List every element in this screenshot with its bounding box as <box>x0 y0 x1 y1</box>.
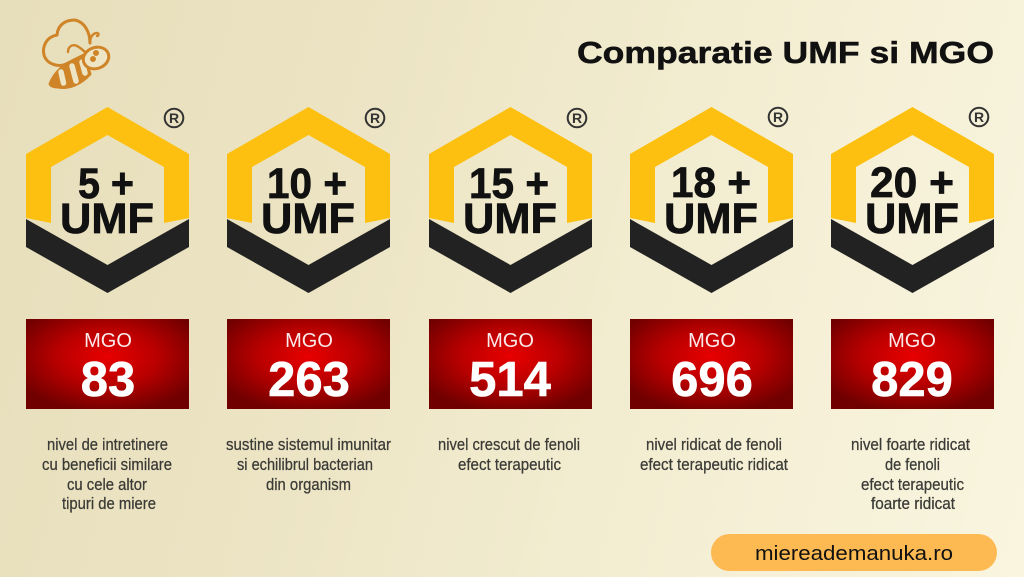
icon: hexagon badge 5+ <box>26 107 189 293</box>
icon: hexagon badge 15+: UMF <box>463 195 557 243</box>
icon: hexagon badge 10+ <box>227 107 390 293</box>
MGO box 263: 263 <box>268 353 350 407</box>
description <box>851 435 970 513</box>
MGO box 696: MGO <box>688 330 736 352</box>
column 4: 18+ UMF <box>630 107 793 474</box>
description: de fenoli <box>885 455 940 474</box>
website pill: miereademanuka.ro <box>755 543 953 565</box>
column 1: 5+ UMF <box>26 107 189 513</box>
description <box>438 435 580 474</box>
MGO box 696: 696 <box>671 353 753 407</box>
MGO box 83 <box>26 319 189 409</box>
description: si echilibrul bacterian <box>237 455 373 474</box>
icon: hexagon badge 18+: 18 + <box>671 159 751 207</box>
description: cu cele altor <box>67 475 147 494</box>
description <box>226 435 391 494</box>
MGO box 514: 514 <box>469 353 551 407</box>
description: nivel ridicat de fenoli <box>646 435 782 454</box>
MGO box 829: MGO <box>888 330 936 352</box>
icon: hexagon badge 10+: R <box>370 110 380 126</box>
description: nivel crescut de fenoli <box>438 435 580 454</box>
MGO box 829: 829 <box>871 353 953 407</box>
description: tipuri de miere <box>62 494 156 513</box>
icon: hexagon badge 15+: R <box>572 110 582 126</box>
column 3: 15+ UMF <box>429 107 592 474</box>
icon: hexagon badge 18+: R <box>773 109 783 125</box>
description: efect terapeutic <box>861 475 964 494</box>
description: efect terapeutic ridicat <box>640 455 788 474</box>
icon: hexagon badge 15+ <box>429 107 592 293</box>
description: din organism <box>266 475 351 494</box>
description: foarte ridicat <box>871 494 955 513</box>
MGO box 514: MGO <box>486 330 534 352</box>
icon: hexagon badge 18+: UMF <box>664 195 758 243</box>
description <box>42 435 172 513</box>
description: nivel de intretinere <box>47 435 168 454</box>
description: efect terapeutic <box>458 455 561 474</box>
icon: hexagon badge 20+: UMF <box>865 195 959 243</box>
icon: hexagon badge 5+: 5 + <box>78 160 134 208</box>
icon: hexagon badge 15+: 15 + <box>469 160 549 208</box>
MGO box 696 <box>630 319 793 409</box>
MGO box 83: 83 <box>81 353 135 407</box>
icon: hexagon badge 20+ <box>831 107 994 293</box>
column 2: 10+ UMF <box>226 107 391 494</box>
description: cu beneficii similare <box>42 455 172 474</box>
description <box>640 435 788 474</box>
website pill <box>711 534 997 571</box>
column 5: 20+ UMF <box>831 107 994 513</box>
MGO box 263 <box>227 319 390 409</box>
MGO box 263: MGO <box>285 330 333 352</box>
MGO box 514 <box>429 319 592 409</box>
title: Comparatie UMF si MGO <box>577 35 994 70</box>
logo: bee icon <box>44 20 112 87</box>
icon: hexagon badge 20+: 20 + <box>870 159 954 207</box>
MGO box 83: MGO <box>84 330 132 352</box>
icon: hexagon badge 10+: UMF <box>261 195 355 243</box>
MGO box 829 <box>831 319 994 409</box>
icon: hexagon badge 18+ <box>630 107 793 293</box>
icon: hexagon badge 5+: R <box>169 110 179 126</box>
description: nivel foarte ridicat <box>851 435 970 454</box>
icon: hexagon badge 10+: 10 + <box>267 160 347 208</box>
icon: hexagon badge 20+: R <box>974 109 984 125</box>
description: sustine sistemul imunitar <box>226 435 391 454</box>
icon: hexagon badge 5+: UMF <box>60 195 154 243</box>
